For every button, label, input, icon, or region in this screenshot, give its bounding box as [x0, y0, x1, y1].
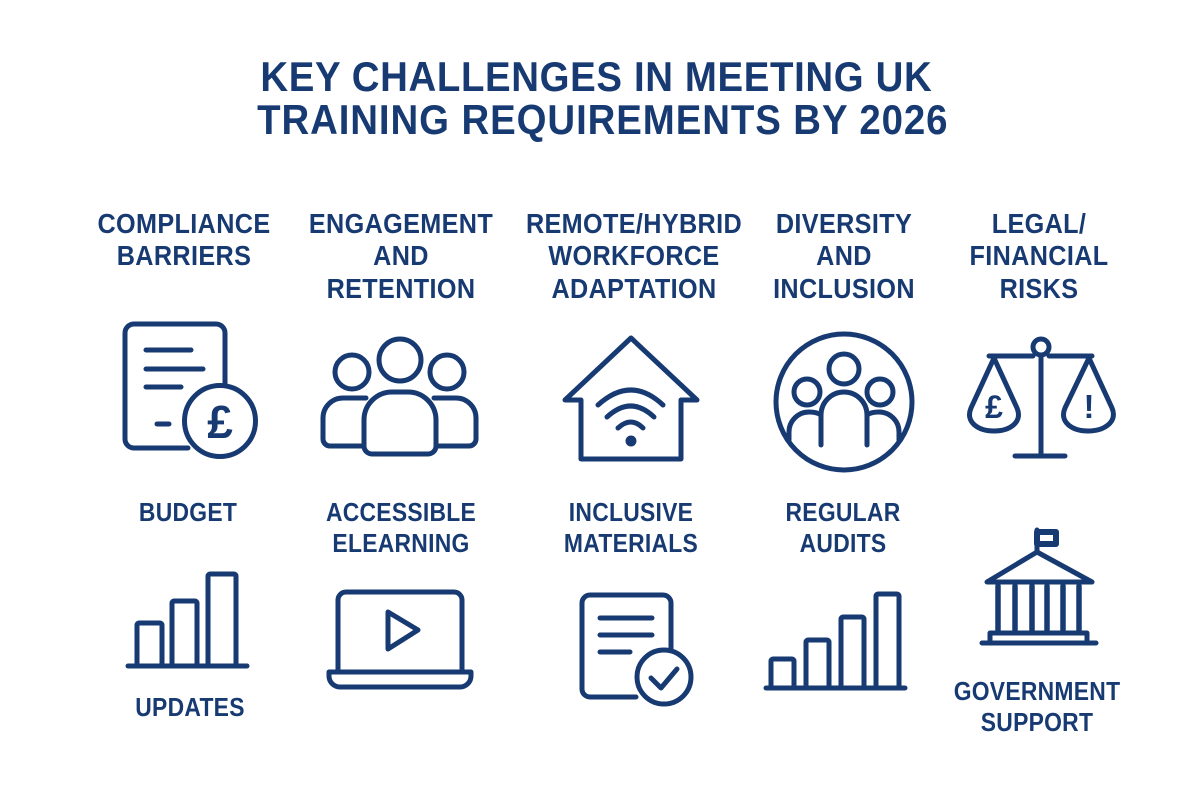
icon: laptop with play: [329, 592, 471, 687]
heading: engagement and retention: AND: [373, 240, 429, 271]
heading: diversity and inclusion: DIVERSITY: [776, 208, 912, 239]
title: [257, 53, 948, 143]
icon: group of people: [323, 339, 476, 454]
title: TRAINING REQUIREMENTS BY 2026: [257, 96, 948, 143]
heading: remote/hybrid workforce adaptation: [526, 208, 742, 304]
heading: engagement and retention: ENGAGEMENT: [309, 208, 493, 239]
heading: legal/financial risks: RISKS: [1000, 273, 1078, 304]
label: inclusive materials: MATERIALS: [564, 528, 698, 558]
icon: scales: !: [1084, 388, 1094, 425]
icon: document with check: [582, 595, 691, 704]
heading: compliance barriers: [97, 208, 271, 271]
icon: people in circle: [776, 334, 912, 470]
heading: diversity and inclusion: AND: [816, 240, 872, 271]
icon: scales: £: [985, 389, 1003, 425]
icon: bar chart updates: [128, 574, 247, 666]
heading: diversity and inclusion: [773, 208, 915, 304]
heading: remote/hybrid workforce adaptation: REMOTE/HYBRID: [526, 208, 742, 239]
heading: engagement and retention: RETENTION: [327, 273, 475, 304]
label: regular audits: [786, 497, 900, 558]
label: accessible elearning: ELEARNING: [332, 528, 470, 558]
label: government support: GOVERNMENT: [954, 676, 1120, 706]
label: regular audits: AUDITS: [800, 528, 886, 558]
heading: legal/financial risks: [969, 208, 1109, 304]
heading: diversity and inclusion: INCLUSION: [773, 273, 915, 304]
heading: compliance barriers: BARRIERS: [117, 240, 251, 271]
label: budget: BUDGET: [139, 497, 237, 527]
heading: legal/financial risks: FINANCIAL: [969, 240, 1109, 271]
label: government support: SUPPORT: [981, 706, 1093, 736]
label: government support: [954, 676, 1120, 736]
label: regular audits: REGULAR: [786, 497, 900, 527]
label: inclusive materials: [564, 497, 698, 558]
icon: document with pound: £: [207, 396, 233, 448]
heading: remote/hybrid workforce adaptation: WORKFORCE: [548, 240, 720, 271]
title: KEY CHALLENGES IN MEETING UK: [260, 53, 932, 100]
label: inclusive materials: INCLUSIVE: [569, 497, 693, 527]
heading: legal/financial risks: LEGAL/: [992, 208, 1086, 239]
icon: document with pound: [125, 324, 256, 456]
label: accessible elearning: ACCESSIBLE: [326, 497, 476, 527]
heading: engagement and retention: [309, 208, 493, 304]
label: updates: UPDATES: [135, 692, 245, 722]
heading: compliance barriers: COMPLIANCE: [97, 208, 271, 239]
icon: house with wifi: [565, 338, 697, 459]
heading: remote/hybrid workforce adaptation: ADAPTATION: [551, 273, 717, 304]
icon: bar chart audits: [766, 594, 905, 688]
icon: scales: [970, 339, 1113, 456]
icon: government building: [982, 530, 1096, 643]
label: accessible elearning: [326, 497, 476, 558]
